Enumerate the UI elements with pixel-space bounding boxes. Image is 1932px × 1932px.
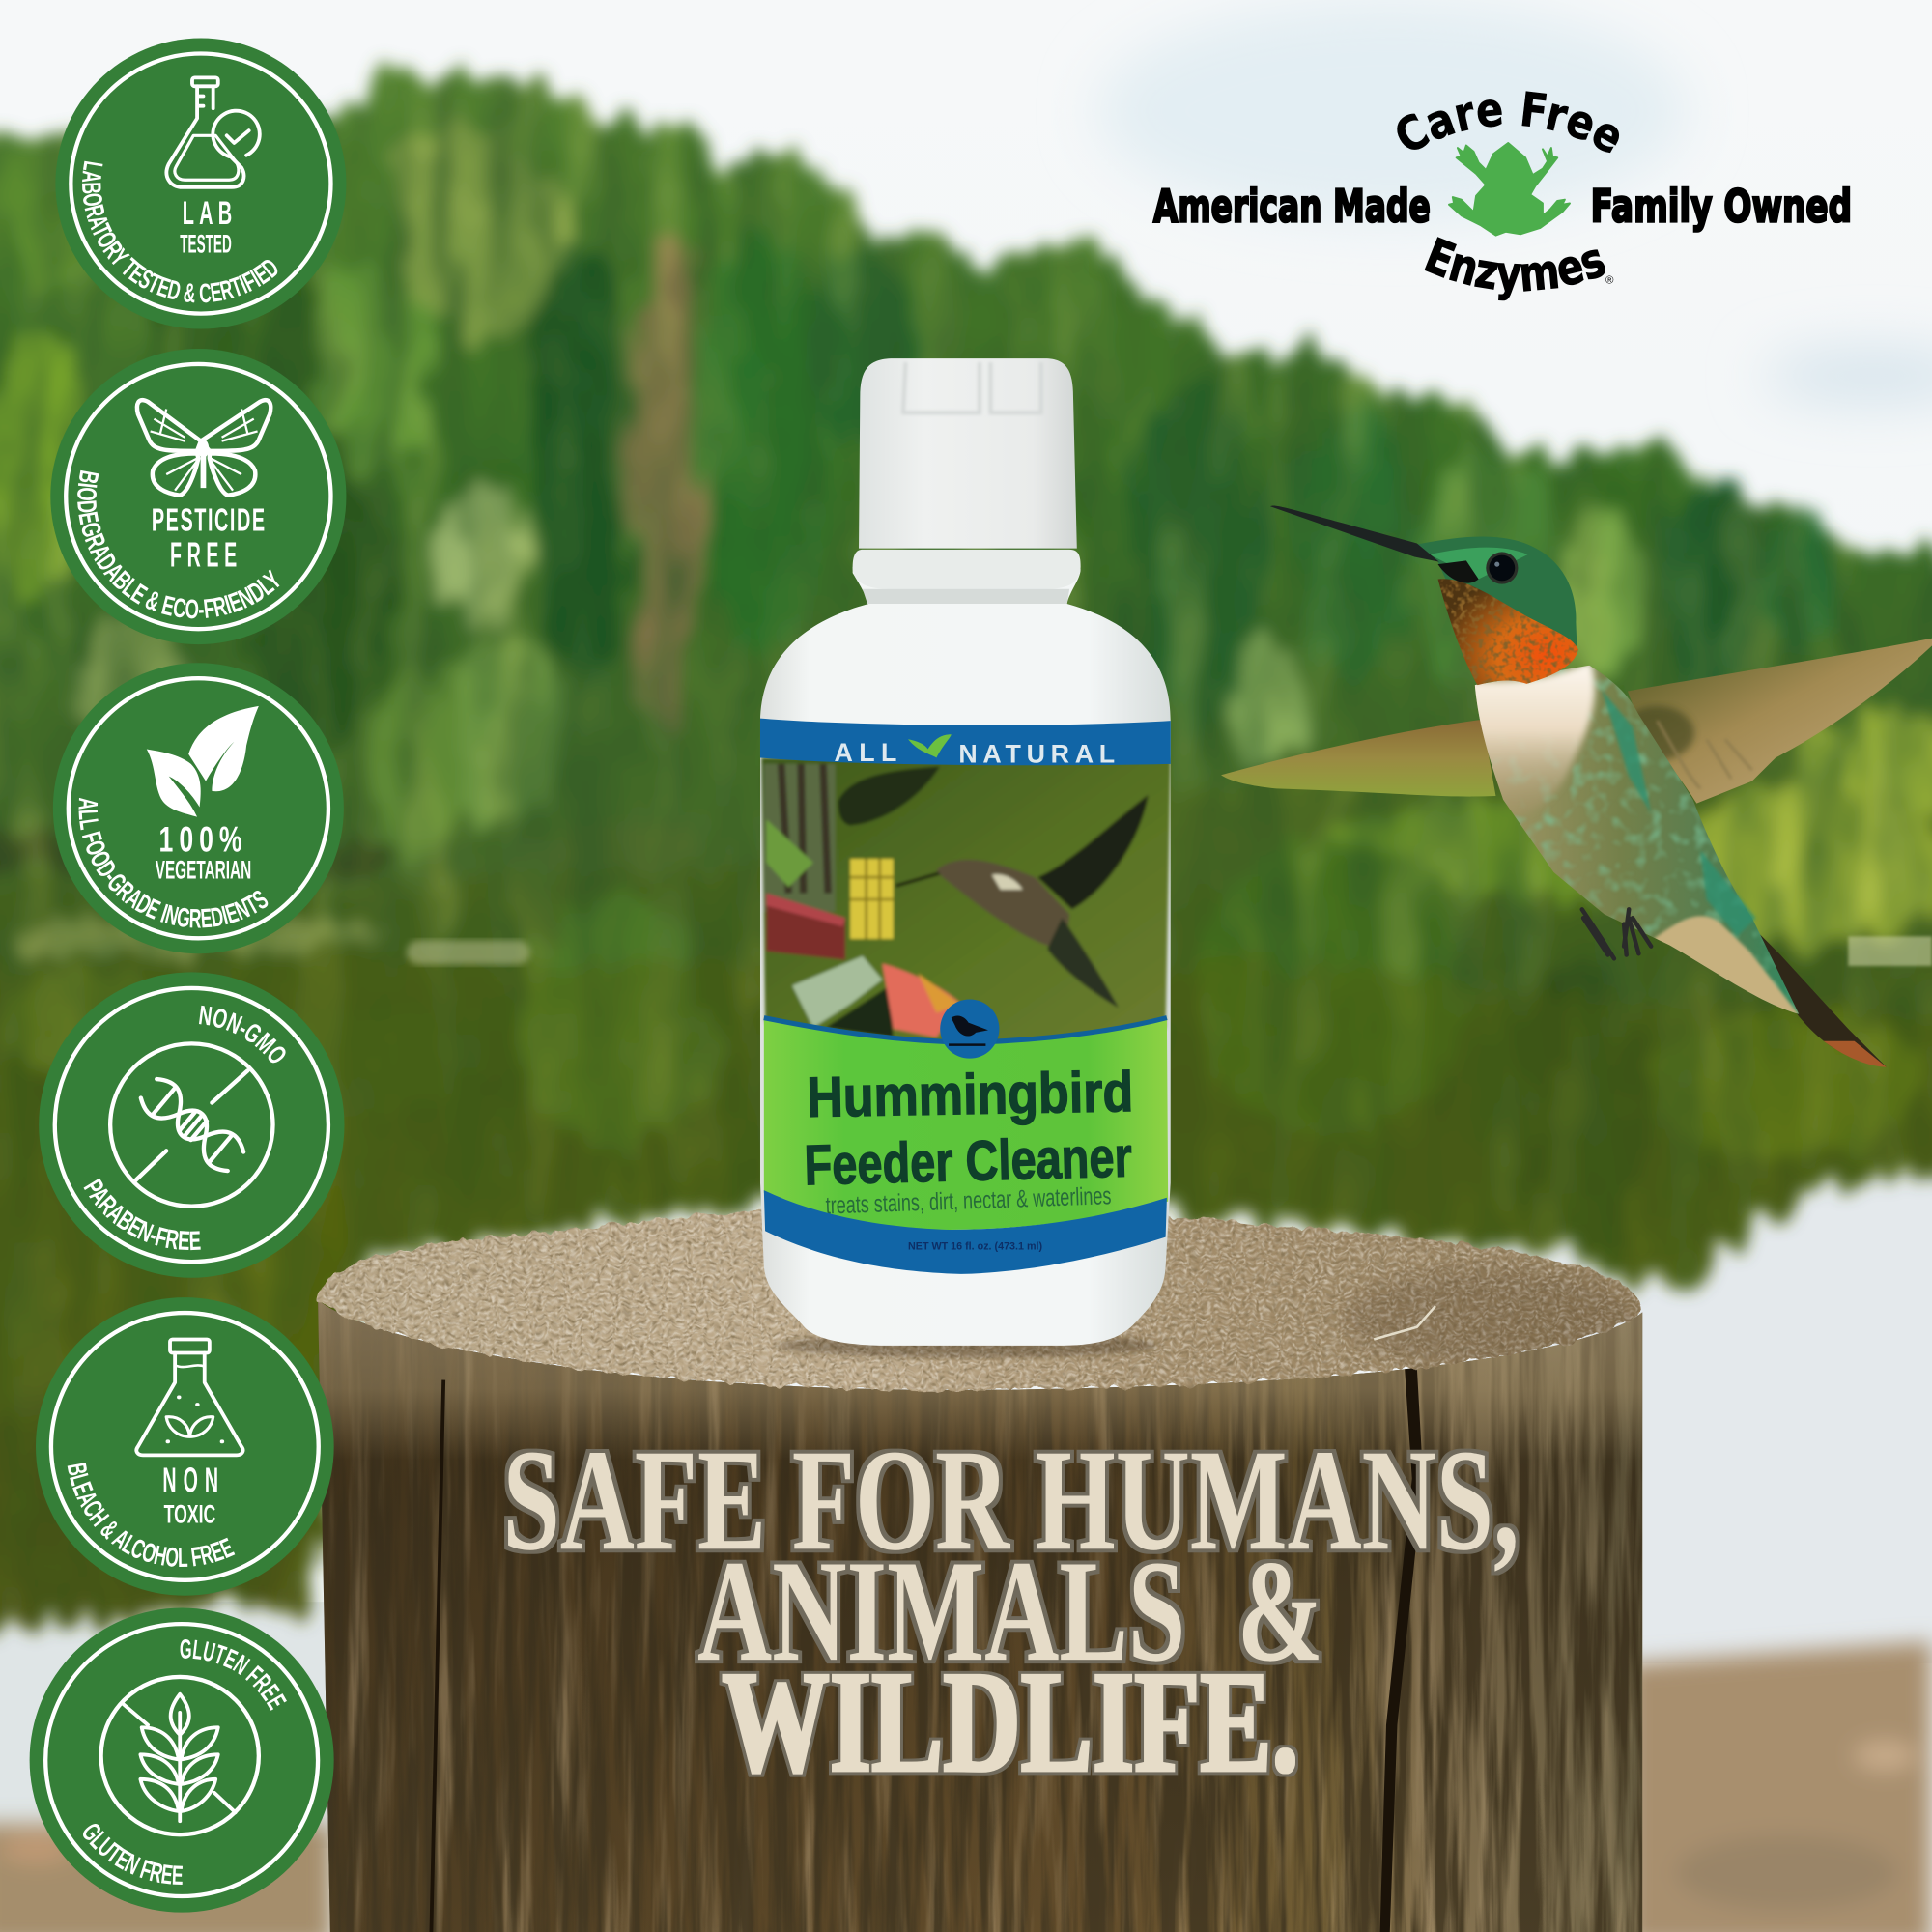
label: bottom blue band	[764, 1190, 1167, 1274]
logo text: Enzymes	[1355, 234, 1676, 291]
badge: gluten free	[30, 1608, 334, 1913]
icon: crossed DNA	[134, 1070, 248, 1181]
text: PESTICIDE: PESTICIDE	[152, 501, 267, 538]
icon: leaves	[147, 706, 259, 817]
label: product name: treats stains, dirt, nectar & waterlines	[825, 1182, 1112, 1219]
text: FREE: FREE	[170, 537, 242, 575]
label: bird emblem	[940, 999, 999, 1059]
right wing	[1628, 639, 1932, 804]
reflection tone overlay	[0, 961, 1932, 1627]
badge: vegetarian	[53, 663, 344, 953]
feet	[1582, 909, 1651, 958]
beak	[1270, 506, 1439, 562]
eye	[1486, 552, 1518, 584]
logo text: Family Owned: Family Owned	[1591, 181, 1852, 233]
curved text: NON-GMO: NON-GMO	[197, 1000, 293, 1070]
icon: flask with check	[166, 77, 260, 187]
curved text: top: GLUTEN FREE	[180, 1634, 292, 1714]
curved text: bottom: GLUTEN FREE	[75, 1817, 184, 1890]
curved text: PARABEN-FREE: PARABEN-FREE	[78, 1175, 202, 1256]
logo: Care Free Enzymes: Enzymes	[1417, 227, 1612, 302]
label: product name	[804, 1061, 1134, 1219]
logo: Care Free Enzymes: Care Free	[1386, 82, 1633, 165]
left wing	[1221, 720, 1495, 797]
badge: pesticide free	[50, 349, 346, 644]
throat	[1435, 573, 1580, 688]
water reflection	[0, 715, 1932, 1627]
curved text: BLEACH & ALCOHOL FREE	[62, 1461, 238, 1573]
chest	[1466, 661, 1595, 815]
label: product name: Hummingbird	[807, 1061, 1134, 1129]
icon: butterfly	[137, 400, 270, 496]
text: 100%: 100%	[159, 819, 248, 859]
tree stump	[318, 1208, 1644, 1932]
headline line 1: SAFE FOR HUMANS,	[502, 1419, 1520, 1580]
headline	[502, 1419, 1520, 1803]
curved text: LABORATORY TESTED & CERTIFIED	[82, 160, 278, 303]
label: green panel	[764, 1018, 1168, 1230]
label: top blue band: NATURAL	[958, 740, 1121, 769]
bottle cap	[859, 358, 1077, 549]
logo: Care Free Enzymes	[1153, 82, 1852, 302]
curved text: ALL FOOD-GRADE INGREDIENTS	[79, 798, 269, 928]
badge: non-gmo	[39, 972, 345, 1278]
curved text: BIODEGRADABLE & ECO-FRIENDLY	[77, 469, 280, 618]
icon: frog	[1449, 143, 1570, 236]
ground	[1627, 1641, 1932, 1932]
body	[1475, 666, 1799, 1014]
bottle collar	[853, 550, 1081, 589]
hummingbird	[1221, 506, 1932, 1067]
label: top blue band	[760, 719, 1171, 769]
logo text: American Made: American Made	[1153, 181, 1431, 233]
label: top blue band: ALL	[835, 738, 903, 767]
stump cut top	[318, 1208, 1644, 1392]
rump	[1654, 916, 1802, 1018]
bottle body	[760, 567, 1171, 1346]
label: bottom blue band: NET WT 16 fl. oz. (473.1 ml)	[908, 1240, 1042, 1252]
text: TESTED: TESTED	[180, 229, 232, 258]
label: product name: Feeder Cleaner	[804, 1125, 1133, 1197]
icon: crossed wheat	[124, 1694, 236, 1821]
label bird	[895, 795, 1149, 1008]
forest patches	[388, 129, 604, 345]
text: VEGETARIAN: VEGETARIAN	[156, 855, 251, 884]
badge: non toxic	[36, 1297, 334, 1596]
product bottle	[760, 358, 1171, 1358]
forest hill	[0, 68, 1932, 912]
text: LAB: LAB	[183, 195, 237, 231]
text: NON: NON	[162, 1463, 225, 1500]
icon: flask with leaf	[136, 1339, 243, 1455]
stump bark side	[318, 1300, 1642, 1932]
text: TOXIC: TOXIC	[164, 1500, 215, 1529]
headline line 3: WILDLIFE.	[722, 1641, 1298, 1803]
registered mark: ®	[1605, 274, 1614, 286]
tail	[1744, 918, 1887, 1067]
head	[1416, 537, 1577, 653]
badge: lab tested	[55, 39, 346, 329]
logo text: Care Free	[1324, 126, 1694, 282]
label: photo of bird at feeder	[761, 757, 1171, 1047]
back sheen	[1602, 690, 1756, 936]
headline line 2: ANIMALS &	[697, 1530, 1323, 1691]
